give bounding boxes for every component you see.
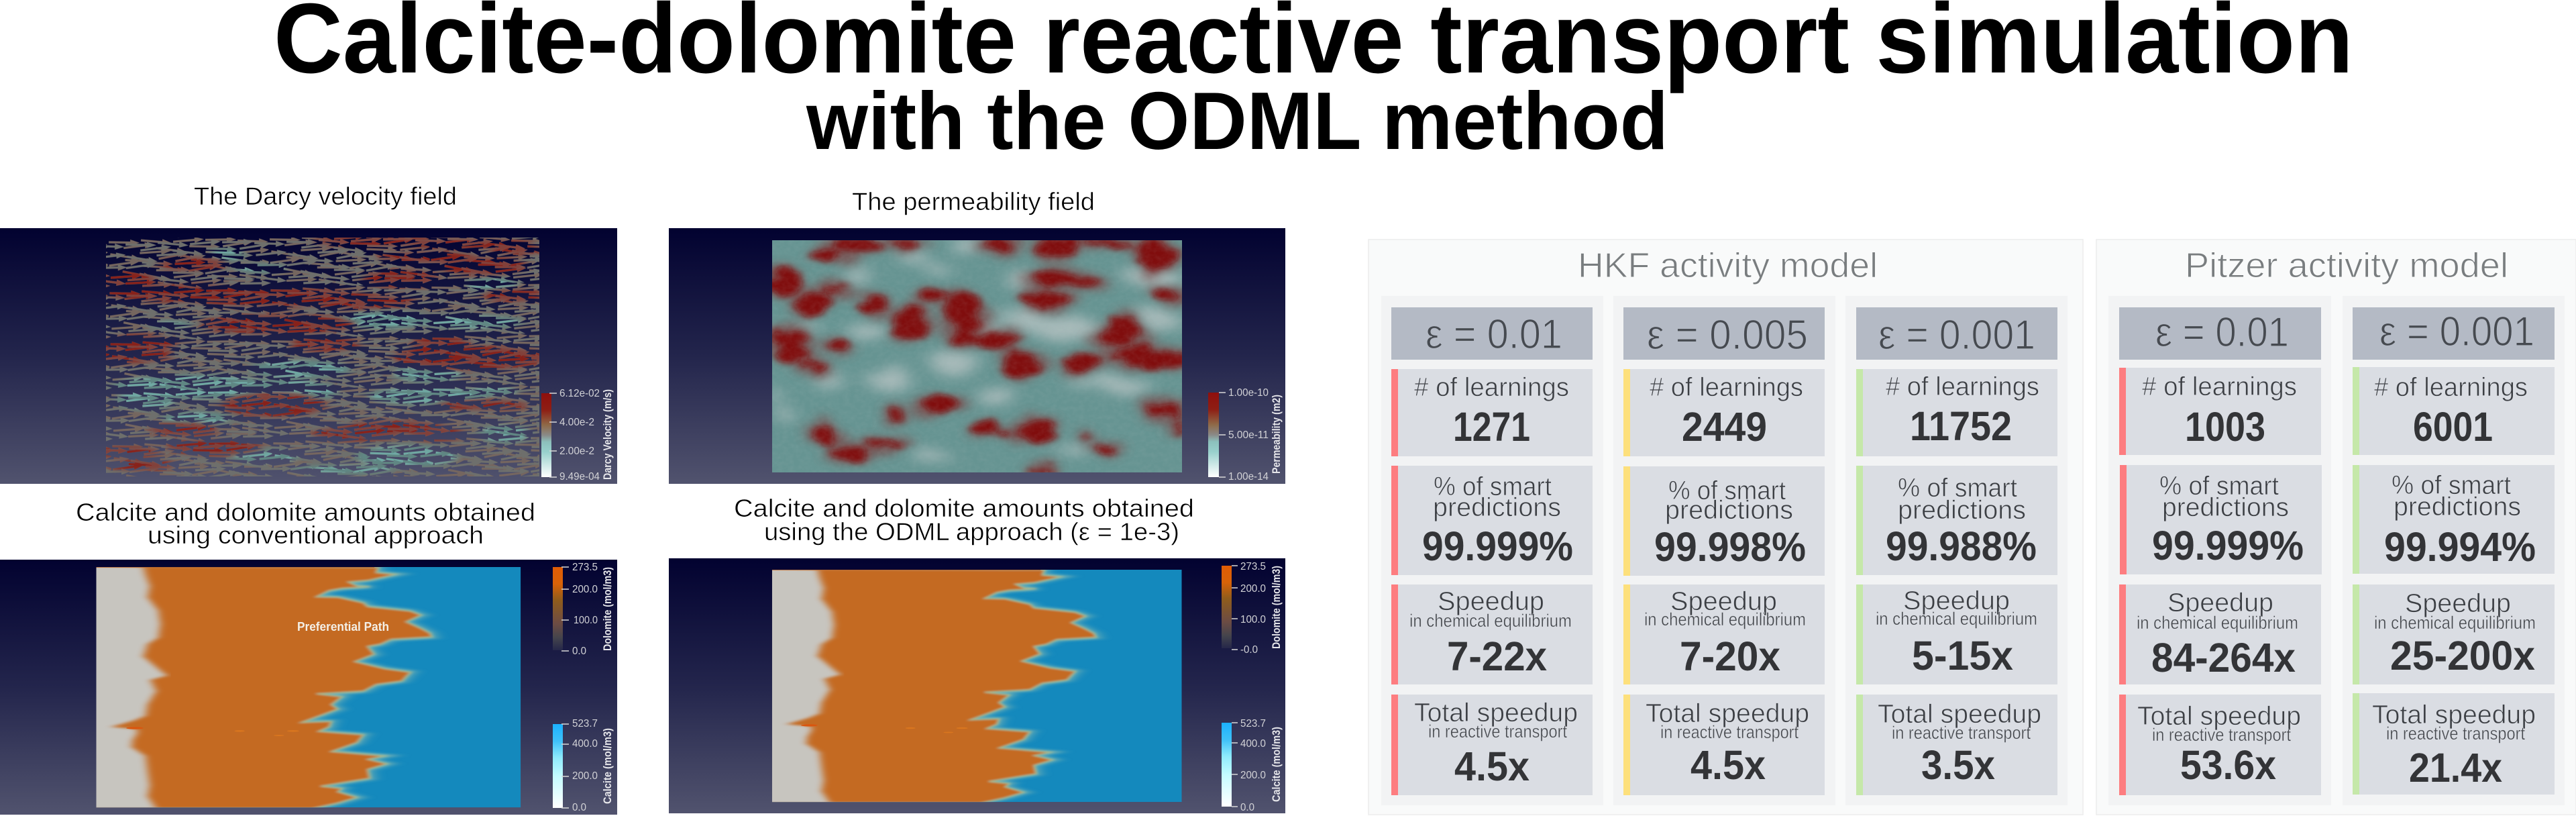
panel: HKF activity model (1368, 240, 2083, 815)
card: % of smart predictions 99.988%: % of smart (1898, 474, 2017, 503)
colour bar: dolomite (553, 562, 614, 657)
card: total speedup in reactive transport 4.5x: 4.5x (1690, 742, 1766, 788)
colour bar: calcite (553, 718, 614, 813)
card: total speedup in reactive transport 21.4x: 21.4x (2409, 745, 2502, 790)
card: speedup in chemical equilibrium 25-200x: Speedup (2405, 589, 2511, 618)
colour bar: calcite: 400.0 (1240, 738, 1266, 750)
heading: conventional approach: Calcite and dolomite amounts obtained (76, 499, 535, 526)
card: % of smart predictions 99.998%: 99.998% (1654, 524, 1806, 570)
column: HKF ε = 0.001 (1845, 296, 2068, 805)
card: % of smart predictions 99.998%: predictions (1665, 496, 1793, 525)
card: speedup in chemical equilibrium 5-15x: 5-15x (1912, 633, 2013, 678)
card: % of smart predictions 99.999%: % of smart (1434, 472, 1552, 501)
card: # of learnings 1003: 1003 (2185, 404, 2265, 450)
card: % of smart predictions 99.998%: % of smart (1668, 476, 1786, 505)
heading: ODML approach (734, 495, 1194, 546)
card: total speedup in reactive transport 4.5x (1623, 695, 1825, 795)
card: speedup in chemical equilibrium 84-264x: 84-264x (2151, 635, 2296, 680)
card: % of smart predictions 99.994% (2353, 465, 2555, 574)
card: total speedup in reactive transport 4.5x: Total speedup (1646, 699, 1809, 728)
card: % of smart predictions 99.988%: 99.988% (1886, 523, 2037, 569)
card: % of smart predictions 99.988%: predictions (1898, 496, 2026, 525)
colour bar: Darcy velocity: 6.12e-02 (559, 388, 600, 399)
reaction front map (762, 568, 1182, 803)
card: speedup in chemical equilibrium 7-22x: 7-22x (1447, 633, 1547, 679)
card: % of smart predictions 99.994%: % of smart (2392, 471, 2511, 500)
card: total speedup in reactive transport 21.4x: in reactive transport (2386, 723, 2525, 744)
card: total speedup in reactive transport 21.4x (2353, 693, 2555, 795)
card: # of learnings 6001: # of learnings (2374, 373, 2528, 402)
card: total speedup in reactive transport 21.4x: Total speedup (2372, 701, 2536, 729)
header: ε = 0.005: ε = 0.005 (1647, 312, 1808, 358)
heading: HKF activity model: HKF activity model (1578, 246, 1878, 285)
card: speedup in chemical equilibrium 84-264x: in chemical equilibrium (2137, 613, 2298, 633)
card: # of learnings 1271: # of learnings (1414, 373, 1569, 402)
card: speedup in chemical equilibrium 25-200x: 25-200x (2390, 633, 2535, 678)
card: speedup in chemical equilibrium 84-264x: Speedup (2167, 589, 2273, 617)
card: % of smart predictions 99.988% (1856, 466, 2057, 575)
card: speedup in chemical equilibrium 7-20x (1623, 584, 1825, 684)
colour bar: Darcy velocity: 4.00e-2 (559, 417, 594, 428)
card: # of learnings 11752: # of learnings (1886, 372, 2039, 401)
card: % of smart predictions 99.999% (1391, 466, 1593, 575)
card: total speedup in reactive transport 3.5x: 3.5x (1921, 742, 1995, 788)
colour bar: dolomite: Dolomite (mol/m3) (601, 567, 614, 651)
card: # of learnings 11752: 11752 (1910, 403, 2012, 449)
card: total speedup in reactive transport 53.6x: Total speedup (2137, 702, 2301, 731)
card: % of smart predictions 99.999%: % of smart (2159, 472, 2279, 501)
colour bar: Darcy velocity (541, 388, 614, 482)
column: HKF ε = 0.01 (1381, 296, 1603, 805)
colour bar: Darcy velocity: 9.49e-04 (559, 471, 600, 482)
heading: Darcy velocity: The Darcy velocity field (194, 183, 457, 210)
card: speedup in chemical equilibrium 7-20x: Speedup (1670, 587, 1777, 616)
card: speedup in chemical equilibrium 7-22x: Speedup (1438, 587, 1544, 616)
colour bar: permeability (1208, 387, 1283, 482)
colour bar: calcite: 200.0 (572, 770, 598, 782)
panel: ODML approach result (669, 558, 1285, 813)
card: total speedup in reactive transport 4.5x: 4.5x (1454, 744, 1529, 789)
colour bar: dolomite: 0.0 (572, 646, 586, 657)
card: speedup in chemical equilibrium 25-200x: in chemical equilibrium (2374, 613, 2536, 633)
card: total speedup in reactive transport 3.5x: in reactive transport (1892, 723, 2031, 743)
card: total speedup in reactive transport 4.5x: in reactive transport (1660, 722, 1799, 742)
card: % of smart predictions 99.998% (1623, 466, 1825, 576)
header: ε = 0.001: ε = 0.001 (1878, 312, 2035, 358)
card: # of learnings 1271 (1391, 369, 1593, 456)
card: % of smart predictions 99.999% (2120, 465, 2322, 574)
card: # of learnings 11752 (1856, 369, 2057, 456)
colour bar: permeability: 1.00e-10 (1228, 387, 1269, 399)
colour bar: calcite: 200.0 (1240, 770, 1266, 781)
card: % of smart predictions 99.994%: predictions (2394, 493, 2521, 521)
reaction front map (86, 566, 521, 809)
colour bar: calcite: 523.7 (572, 718, 598, 729)
heading: ODML approach: using the ODML approach (ε = 1e-3) (764, 518, 1179, 546)
card: speedup in chemical equilibrium 5-15x (1856, 584, 2057, 684)
card: % of smart predictions 99.999%: predictions (2162, 493, 2289, 522)
header: ε = 0.01: ε = 0.01 (2155, 309, 2289, 356)
header: ε = 0.01 (1391, 307, 1593, 360)
colour bar: permeability: Permeability (m2) (1270, 395, 1283, 474)
panel: conventional approach result (0, 560, 617, 815)
card: total speedup in reactive transport 53.6x: 53.6x (2180, 742, 2276, 788)
colour bar: permeability: 5.00e-11 (1228, 429, 1269, 441)
heading: ODML approach: Calcite and dolomite amounts obtained (734, 495, 1194, 522)
colour bar: permeability: 1.00e-14 (1228, 471, 1269, 482)
card: total speedup in reactive transport 53.6x: in reactive transport (2152, 725, 2291, 745)
card: # of learnings 1271: 1271 (1453, 404, 1530, 450)
card: % of smart predictions 99.999%: 99.999% (1422, 523, 1573, 569)
card: # of learnings 6001 (2353, 367, 2555, 455)
card: # of learnings 2449: # of learnings (1650, 373, 1803, 402)
card: total speedup in reactive transport 4.5x: in reactive transport (1428, 721, 1567, 742)
vector arrow field (106, 238, 539, 476)
annotation: preferential path: Preferential Path (297, 620, 389, 633)
column: Pitzer ε = 0.001 (2343, 296, 2565, 805)
card: # of learnings 2449: 2449 (1682, 404, 1767, 450)
heading: conventional approach: using conventional approach (148, 521, 484, 549)
header: ε = 0.01 (2119, 307, 2321, 360)
panel: permeability field (669, 228, 1285, 484)
colour bar: dolomite: 100.0 (574, 615, 598, 626)
colour bar: calcite: Calcite (mol/m3) (601, 728, 614, 804)
colour bar: calcite (1222, 718, 1283, 813)
panel: Darcy velocity field (0, 228, 617, 484)
colour bar: dolomite: 273.5 (572, 562, 598, 573)
card: total speedup in reactive transport 4.5x (1391, 695, 1593, 795)
card: total speedup in reactive transport 53.6x (2119, 695, 2321, 795)
card: speedup in chemical equilibrium 84-264x (2119, 584, 2321, 684)
column: HKF ε = 0.005 (1613, 296, 1835, 805)
card: # of learnings 2449 (1623, 369, 1825, 456)
colour bar: dolomite: 273.5 (1240, 561, 1266, 572)
card: speedup in chemical equilibrium 5-15x: Speedup (1903, 586, 2010, 615)
column: Pitzer ε = 0.01 (2108, 296, 2331, 805)
card: speedup in chemical equilibrium 7-22x (1391, 584, 1593, 684)
colour bar: calcite: Calcite (mol/m3) (1270, 727, 1283, 802)
card: % of smart predictions 99.999%: predictions (1433, 493, 1561, 522)
card: speedup in chemical equilibrium 5-15x: in chemical equilibrium (1876, 609, 2037, 629)
card: # of learnings 6001: 6001 (2413, 404, 2493, 450)
colour bar: dolomite: 200.0 (1240, 583, 1266, 595)
colour bar: calcite: 400.0 (572, 738, 598, 750)
colour bar: dolomite: 200.0 (572, 584, 598, 595)
header: ε = 0.001: ε = 0.001 (2379, 309, 2534, 355)
card: # of learnings 1003: # of learnings (2142, 372, 2297, 401)
card: # of learnings 1003 (2119, 368, 2321, 455)
colour bar: calcite: 0.0 (1240, 802, 1254, 813)
colour bar: calcite: 523.7 (1240, 718, 1266, 729)
card: % of smart predictions 99.994%: 99.994% (2384, 524, 2536, 570)
colour bar: Darcy velocity: Darcy Velocity (m/s) (601, 389, 614, 480)
colour bar: dolomite: -0.0 (1240, 644, 1258, 656)
card: speedup in chemical equilibrium 7-20x: in chemical equilibrium (1644, 609, 1806, 629)
colour bar: dolomite (1222, 561, 1283, 656)
title line 2: with the ODML method (806, 75, 1668, 166)
heading: Pitzer activity model: Pitzer activity model (2185, 246, 2508, 285)
panel: Pitzer activity model (2096, 240, 2576, 815)
colour bar: calcite: 0.0 (572, 802, 586, 813)
colour bar: dolomite: 100.0 (1240, 614, 1266, 625)
permeability map (771, 237, 1183, 472)
heading: conventional approach (76, 499, 535, 549)
heading: permeability: The permeability field (852, 188, 1095, 215)
card: total speedup in reactive transport 3.5x: Total speedup (1878, 700, 2041, 729)
header: ε = 0.01: ε = 0.01 (1426, 311, 1562, 358)
card: % of smart predictions 99.999%: 99.999% (2152, 523, 2304, 568)
colour bar: dolomite: Dolomite (mol/m3) (1270, 566, 1283, 649)
card: speedup in chemical equilibrium 7-20x: 7-20x (1680, 633, 1780, 679)
card: speedup in chemical equilibrium 7-22x: in chemical equilibrium (1409, 611, 1572, 631)
title (274, 0, 2353, 166)
card: total speedup in reactive transport 4.5x: Total speedup (1414, 699, 1578, 727)
colour bar: Darcy velocity: 2.00e-2 (559, 446, 594, 457)
card: speedup in chemical equilibrium 25-200x (2353, 584, 2555, 684)
card: total speedup in reactive transport 3.5x (1856, 695, 2057, 795)
